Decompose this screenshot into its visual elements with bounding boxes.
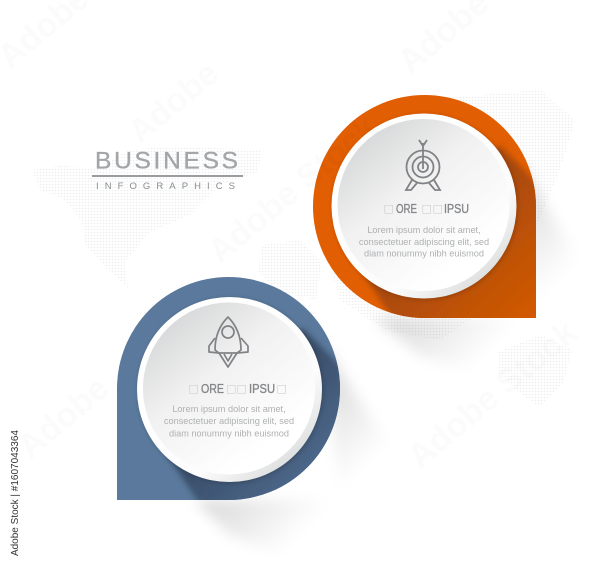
cast shadow on blue pin	[166, 327, 340, 500]
body text: blue disc: diam nonummy nibh euismod	[169, 428, 289, 438]
panel: blue pin	[117, 277, 350, 512]
disc face	[143, 302, 315, 474]
stock credit: Adobe Stock | #1607043364	[10, 430, 21, 556]
heading: blue disc: □	[190, 380, 198, 396]
icon: target with arrow	[406, 140, 440, 190]
heading: orange disc: ORE	[396, 202, 417, 216]
disc rim	[332, 114, 516, 298]
title	[92, 148, 243, 192]
body text: orange disc: Lorem ipsum dolor sit amet,	[367, 225, 481, 235]
icon: rocket	[209, 317, 248, 367]
body text: orange disc: consectetuer adipiscing elit, sed	[359, 237, 489, 247]
long shadow: orange pin	[375, 160, 590, 380]
heading: orange disc	[384, 200, 469, 216]
long shadow: blue pin	[195, 345, 400, 560]
heading: blue disc: IPSU	[249, 382, 275, 396]
disc shadow	[138, 298, 324, 484]
body text: blue disc: consectetuer adipiscing elit, sed	[164, 416, 294, 426]
disc rim	[137, 297, 322, 482]
heading: blue disc: □	[227, 380, 236, 396]
heading: blue disc: □	[278, 380, 286, 396]
dotted world map background	[32, 90, 575, 407]
panel: orange pin	[313, 95, 545, 330]
heading: orange disc: □	[422, 200, 432, 216]
pin shape: orange	[313, 95, 536, 318]
pin shape: blue	[117, 277, 340, 500]
body text: blue disc	[164, 404, 294, 438]
body text: orange disc: diam nonummy nibh euismod	[364, 248, 484, 258]
body text: orange disc	[359, 225, 489, 258]
cast shadow on orange pin	[361, 144, 536, 318]
heading: blue disc: □	[238, 380, 246, 396]
heading: orange disc: □	[384, 200, 394, 216]
body text: blue disc: Lorem ipsum dolor sit amet,	[172, 404, 286, 414]
heading: orange disc: □	[434, 200, 442, 216]
subtitle: INFOGRAPHICS	[96, 181, 235, 192]
title rule	[92, 175, 243, 177]
heading: blue disc	[190, 380, 286, 396]
heading: orange disc: IPSU	[444, 202, 469, 216]
disc shadow	[332, 114, 518, 300]
heading: blue disc: ORE	[201, 382, 224, 396]
title: BUSINESS: BUSINESS	[95, 148, 238, 174]
disc face	[338, 119, 510, 291]
